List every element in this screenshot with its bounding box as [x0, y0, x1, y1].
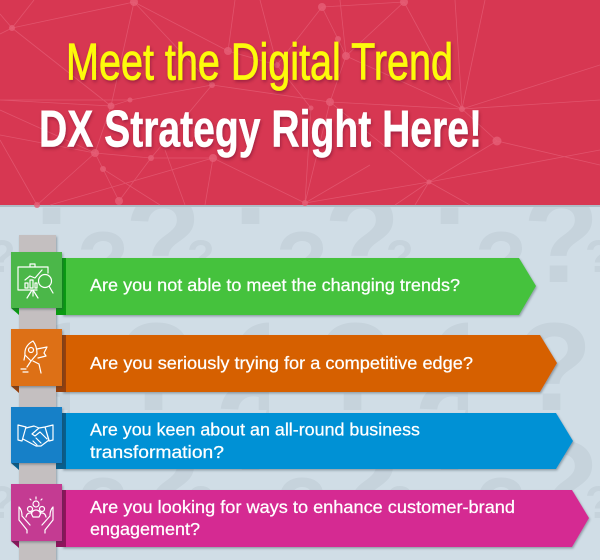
icon: hands holding people [19, 497, 53, 533]
icon: handshake [18, 425, 53, 446]
vertical pole [19, 235, 56, 560]
icon tile [11, 484, 62, 541]
ribbon folds [11, 490, 66, 548]
row 2: orange [11, 329, 557, 393]
header banner [0, 0, 600, 208]
icon tile [11, 252, 62, 308]
arrow banner [62, 413, 573, 469]
icon: presentation chart with magnifier [18, 264, 53, 298]
row 3: blue [11, 407, 573, 470]
question text: transformation? [90, 442, 224, 462]
question text: Are you keen about an all-round business [90, 420, 420, 440]
ribbon folds [11, 335, 66, 393]
background with question mark pattern [0, 200, 600, 560]
ribbon folds [11, 258, 66, 315]
question text: Are you not able to meet the changing trends? [90, 275, 460, 295]
row 4: magenta [11, 484, 589, 548]
question text: Are you seriously trying for a competitive edge? [90, 353, 473, 373]
question text [90, 497, 515, 539]
question text [90, 420, 420, 462]
question text: engagement? [90, 519, 200, 539]
question text: Are you looking for ways to enhance customer-brand [90, 497, 515, 517]
icon tile [11, 407, 62, 463]
title line 1: Meet the Digital Trend [66, 34, 453, 92]
icon tile [11, 329, 62, 386]
ribbon folds [11, 413, 66, 470]
icon: rocket runner [21, 341, 47, 373]
arrow banner [62, 258, 536, 315]
row 1: green [11, 252, 536, 315]
arrow banner [62, 490, 589, 547]
arrow banner [62, 335, 557, 392]
network pattern [0, 0, 600, 205]
